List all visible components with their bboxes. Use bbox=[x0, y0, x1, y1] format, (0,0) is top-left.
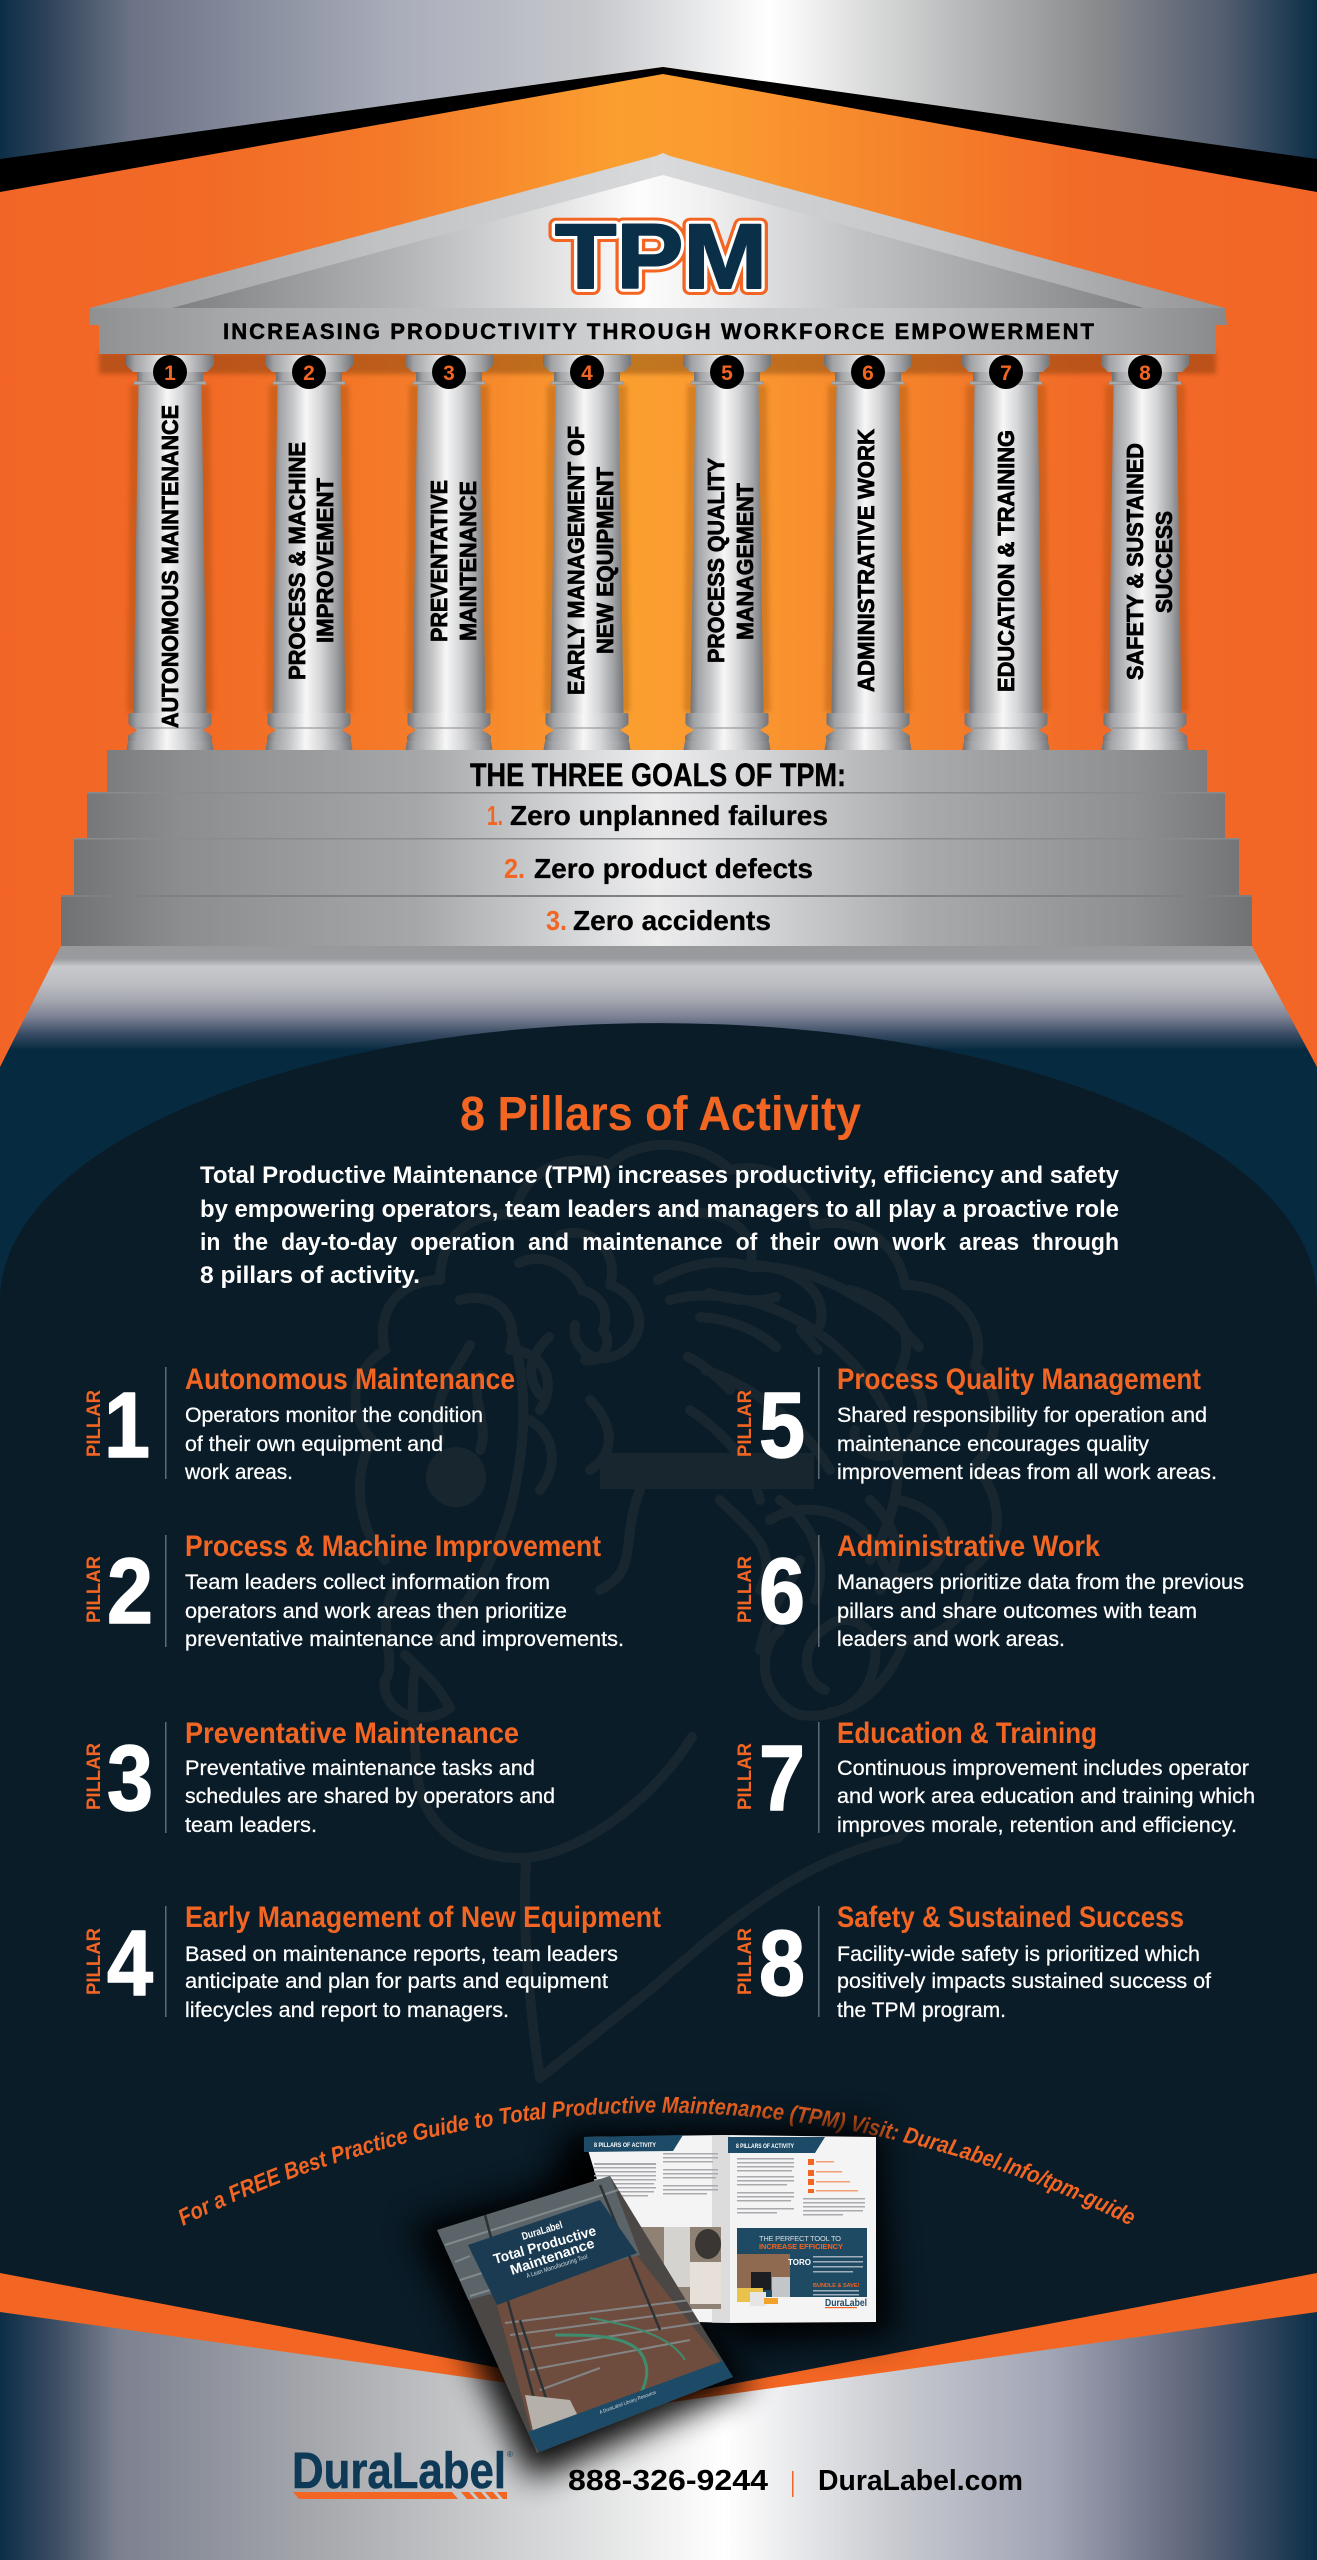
column label 4 bbox=[563, 426, 618, 695]
pillar item 8 bbox=[735, 1901, 1211, 2022]
pillar item 2: PILLAR bbox=[84, 1556, 105, 1623]
goal 3: 3. bbox=[546, 905, 567, 936]
pillar 6 bbox=[824, 355, 912, 750]
pillar 4 bbox=[543, 355, 631, 750]
pillar item 1: work areas. bbox=[184, 1461, 293, 1484]
floor fading to navy bbox=[0, 946, 1317, 1400]
intro paragraph: in the day-to-day operation and maintenance of their own work areas through bbox=[200, 1229, 1119, 1256]
watermark: head illustration bbox=[355, 1145, 997, 2078]
goal 1: Zero unplanned failures bbox=[510, 800, 828, 831]
pillar item 4 bbox=[84, 1901, 661, 2022]
number badge 5 bbox=[710, 355, 744, 389]
pillar item 5: improvement ideas from all work areas. bbox=[837, 1461, 1217, 1484]
pillar item 6: 6 bbox=[759, 1539, 805, 1643]
pillar item 7: Education & Training bbox=[837, 1717, 1097, 1750]
pillar item 8: the TPM program. bbox=[837, 1999, 1006, 2022]
column label 3 bbox=[426, 480, 481, 642]
ad panel: TORO bbox=[788, 2258, 811, 2267]
cover title: Maintenance bbox=[508, 2235, 597, 2278]
goal 1: 1. bbox=[487, 800, 503, 831]
number badge 6: 6 bbox=[862, 362, 874, 385]
column label 7: EDUCATION & TRAINING bbox=[993, 430, 1019, 692]
column label 3: PREVENTATIVE bbox=[426, 480, 452, 642]
booklet shadow bbox=[410, 2125, 895, 2480]
pillar item 4: Early Management of New Equipment bbox=[185, 1901, 661, 1934]
column label 4: EARLY MANAGEMENT OF bbox=[563, 426, 589, 695]
TPM title: TPM bbox=[555, 206, 767, 308]
number badge 1 bbox=[153, 355, 187, 389]
DuraLabel logo: ® bbox=[507, 2450, 513, 2459]
pillar item 1 bbox=[84, 1363, 515, 1484]
column label 5: PROCESS QUALITY bbox=[703, 458, 729, 663]
pillar item 3 bbox=[84, 1717, 555, 1837]
cover footer text: A DuraLabel Library Resource bbox=[599, 2390, 657, 2416]
number badge 2 bbox=[292, 355, 326, 389]
pillar item 4: 4 bbox=[107, 1911, 153, 2015]
column label 4: NEW EQUIPMENT bbox=[592, 466, 618, 654]
pillar item 5: Shared responsibility for operation and bbox=[837, 1404, 1207, 1427]
pillar item 2: Team leaders collect information from bbox=[185, 1571, 550, 1594]
intro paragraph: by empowering operators, team leaders and managers to all play a proactive role bbox=[200, 1196, 1119, 1223]
left page photo bbox=[640, 2227, 721, 2309]
heading: 8 Pillars of Activity: 8 Pillars of Activity bbox=[460, 1088, 861, 1141]
cover photo bbox=[437, 2176, 733, 2453]
pillar item 3: 3 bbox=[107, 1726, 153, 1830]
pillar item 8: 8 bbox=[759, 1911, 805, 2015]
number badge 8: 8 bbox=[1139, 362, 1151, 385]
DuraLabel logo: DuraLabel bbox=[292, 2442, 506, 2499]
page headers bbox=[584, 2135, 825, 2153]
pillar item 2: Process & Machine Improvement bbox=[185, 1530, 601, 1563]
number badge 5: 5 bbox=[721, 362, 733, 385]
pillar item 4: PILLAR bbox=[84, 1928, 105, 1995]
column label 8 bbox=[1122, 443, 1177, 680]
pillar 3 bbox=[405, 355, 493, 750]
column label 8: SAFETY & SUSTAINED bbox=[1122, 443, 1148, 680]
number badge 3 bbox=[432, 355, 466, 389]
pillar item 6 bbox=[735, 1530, 1244, 1651]
pillar item 7: 7 bbox=[759, 1726, 805, 1830]
cover footer strip bbox=[528, 2360, 733, 2452]
number badge 8 bbox=[1128, 355, 1162, 389]
cover title panel bbox=[468, 2200, 637, 2305]
number badge 7: 7 bbox=[1000, 362, 1012, 385]
pillar item 4: lifecycles and report to managers. bbox=[185, 1999, 509, 2022]
pillar 8 bbox=[1101, 355, 1189, 750]
ad panel bbox=[737, 2228, 867, 2306]
column label 2 bbox=[284, 442, 338, 680]
open booklet spread bbox=[584, 2135, 876, 2323]
pillar item 6: Administrative Work bbox=[837, 1530, 1100, 1563]
open booklet spread: 8 PILLARS OF ACTIVITY bbox=[594, 2142, 657, 2149]
intro paragraph bbox=[200, 1162, 1120, 1289]
pillar item 7: Continuous improvement includes operator bbox=[837, 1757, 1249, 1780]
phone number: 888-326-9244 bbox=[568, 2465, 768, 2497]
intro paragraph: Total Productive Maintenance (TPM) increases productivity, efficiency and safety bbox=[200, 1162, 1120, 1189]
pillar item 5: PILLAR bbox=[735, 1390, 756, 1457]
pillar 5 bbox=[683, 355, 771, 750]
number badge 3: 3 bbox=[443, 362, 455, 385]
pillar item 1: PILLAR bbox=[84, 1390, 105, 1457]
pillar item 3: Preventative maintenance tasks and bbox=[185, 1757, 535, 1780]
column label 3: MAINTENANCE bbox=[455, 481, 481, 641]
orange checklist icons bbox=[808, 2159, 858, 2193]
pillar item 4: Based on maintenance reports, team leaders bbox=[185, 1943, 618, 1966]
pillar item 5: 5 bbox=[759, 1373, 805, 1477]
tagline: INCREASING PRODUCTIVITY THROUGH WORKFORCE EMPOWERMENT bbox=[223, 319, 1095, 344]
pillar item 4: anticipate and plan for parts and equipment bbox=[185, 1970, 608, 1993]
goal 2: Zero product defects bbox=[534, 853, 813, 884]
number badge 6 bbox=[851, 355, 885, 389]
column label 2: IMPROVEMENT bbox=[312, 477, 338, 643]
pillar item 8: Facility-wide safety is prioritized which bbox=[837, 1943, 1200, 1966]
pillar item 3: PILLAR bbox=[84, 1743, 105, 1810]
TPM title: TPM bbox=[555, 206, 767, 308]
ad panel: THE PERFECT TOOL TO bbox=[759, 2234, 841, 2243]
cover title: Total Productive bbox=[491, 2222, 598, 2267]
goal 3: Zero accidents bbox=[573, 905, 771, 936]
ad logo: DuraLabel bbox=[825, 2298, 867, 2309]
pillar item 8: PILLAR bbox=[735, 1928, 756, 1995]
top metallic banner bbox=[0, 0, 1317, 160]
pillar 2 bbox=[265, 355, 353, 750]
cover logo: DuraLabel bbox=[520, 2219, 564, 2243]
ad panel: BUNDLE & SAVE! bbox=[813, 2283, 860, 2289]
pillar item 8: Safety & Sustained Success bbox=[837, 1901, 1184, 1934]
intro paragraph: 8 pillars of activity. bbox=[200, 1262, 420, 1289]
column label 5 bbox=[703, 458, 758, 663]
pillar item 3: team leaders. bbox=[185, 1814, 317, 1837]
goals heading: THE THREE GOALS OF TPM: bbox=[470, 757, 846, 793]
pillar item 7 bbox=[735, 1717, 1255, 1837]
pillar item 2: preventative maintenance and improvements. bbox=[185, 1628, 624, 1651]
pillar item 7: improves morale, retention and efficiency. bbox=[837, 1814, 1237, 1837]
pillar item 6: leaders and work areas. bbox=[837, 1628, 1065, 1651]
goal 2: 2. bbox=[504, 853, 525, 884]
pillar item 1: Operators monitor the condition bbox=[185, 1404, 483, 1427]
temple roof bbox=[89, 153, 1227, 354]
pillar item 7: and work area education and training which bbox=[837, 1785, 1255, 1808]
pillar item 6: Managers prioritize data from the previous bbox=[837, 1571, 1244, 1594]
pillar item 2 bbox=[84, 1530, 624, 1651]
number badge 1: 1 bbox=[164, 362, 176, 385]
pillar item 5: maintenance encourages quality bbox=[837, 1433, 1150, 1456]
dark panel bbox=[0, 1023, 1317, 2420]
pillar 1 bbox=[126, 355, 214, 750]
column label 8: SUCCESS bbox=[1151, 511, 1177, 613]
pillar item 1: Autonomous Maintenance bbox=[185, 1363, 515, 1396]
number badge 7 bbox=[989, 355, 1023, 389]
pillar item 3: schedules are shared by operators and bbox=[185, 1785, 555, 1808]
background: orange field bbox=[0, 0, 1317, 1100]
pillar item 7: PILLAR bbox=[735, 1743, 756, 1810]
column label 6: ADMINISTRATIVE WORK bbox=[853, 429, 879, 692]
pillar item 8: positively impacts sustained success of bbox=[837, 1970, 1211, 1993]
pillar item 6: pillars and share outcomes with team bbox=[837, 1600, 1197, 1623]
pillar item 2: operators and work areas then prioritize bbox=[185, 1600, 567, 1623]
pillar item 2: 2 bbox=[107, 1539, 153, 1643]
pillar 7 bbox=[962, 355, 1050, 750]
pillar item 1: 1 bbox=[104, 1373, 150, 1477]
column label 1: AUTONOMOUS MAINTENANCE bbox=[157, 405, 183, 728]
cover title: A Lean Manufacturing Tool bbox=[525, 2253, 589, 2280]
pillar item 3: Preventative Maintenance bbox=[185, 1717, 519, 1750]
black chevron under banner bbox=[0, 67, 1317, 192]
divider bbox=[792, 2471, 794, 2497]
column label 5: MANAGEMENT bbox=[732, 482, 758, 640]
bottom orange chevron bbox=[0, 2273, 1317, 2406]
pillar item 1: of their own equipment and bbox=[185, 1433, 443, 1456]
column label 2: PROCESS & MACHINE bbox=[284, 442, 310, 680]
page body text blocks bbox=[594, 2153, 865, 2216]
number badge 4: 4 bbox=[581, 362, 593, 385]
pillar item 6: PILLAR bbox=[735, 1556, 756, 1623]
goals steps bbox=[61, 750, 1252, 946]
pillar item 5 bbox=[735, 1363, 1217, 1484]
curved call to action: For a FREE Best Practice Guide to Total Productive Maintenance (TPM) Visit: DuraLabel.Info/tpm-guide bbox=[178, 2096, 1134, 2226]
number badge 2: 2 bbox=[303, 362, 315, 385]
open booklet spread: 8 PILLARS OF ACTIVITY bbox=[736, 2143, 795, 2150]
pillar item 5: Process Quality Management bbox=[837, 1363, 1201, 1396]
TPM title: TPM bbox=[555, 206, 767, 308]
booklet cover bbox=[437, 2176, 745, 2465]
number badge 4 bbox=[570, 355, 604, 389]
shadow below temple roof bbox=[99, 352, 1216, 374]
ad panel: INCREASE EFFICIENCY bbox=[759, 2242, 843, 2251]
website: DuraLabel.com bbox=[818, 2465, 1023, 2497]
bottom metallic banner bbox=[0, 2312, 1317, 2560]
